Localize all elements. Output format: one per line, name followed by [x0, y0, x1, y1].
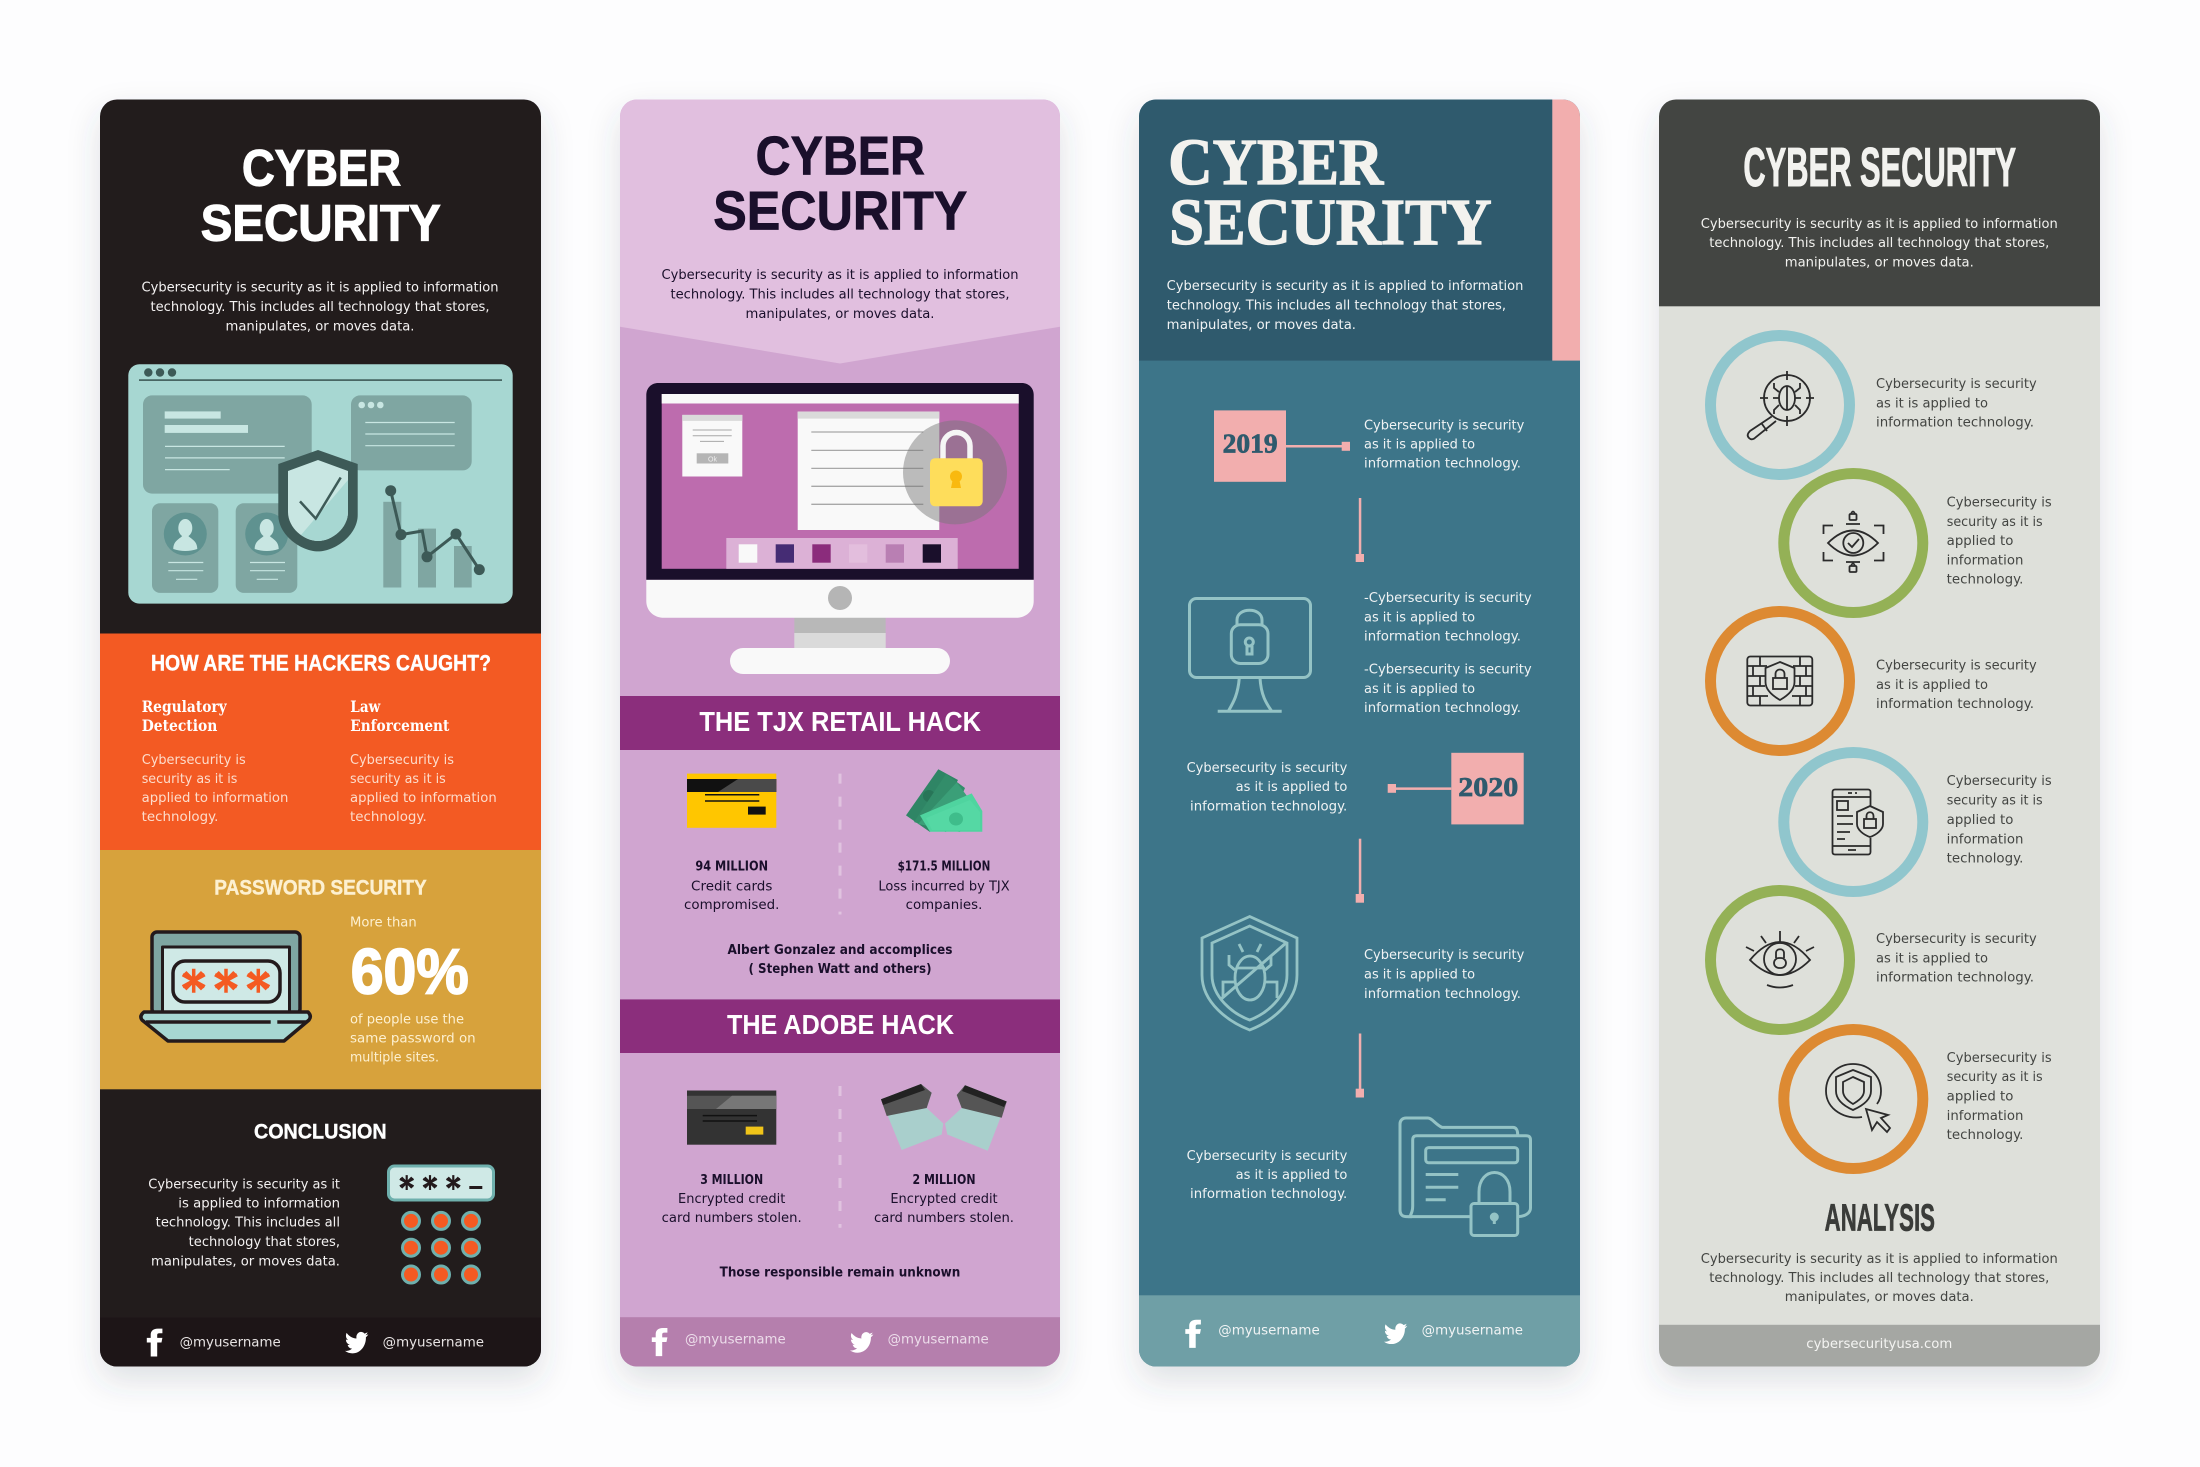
- illustration: security dashboard: [128, 364, 513, 604]
- item: firewall ring: [1710, 612, 2037, 750]
- text: shield description: [1364, 948, 1525, 1002]
- item: locked eye ring: Cybersecurity is security: [1876, 932, 2037, 947]
- footer: social handles: @myusername: [383, 1336, 484, 1351]
- timeline: 2019 marker: 2019: [1223, 428, 1278, 458]
- text: monitor descriptions: -Cybersecurity is security: [1364, 663, 1532, 678]
- section: conclusion: Cybersecurity is security as it: [148, 1177, 340, 1192]
- stat: 94 million: 94 MILLION: [695, 860, 768, 874]
- column: regulatory detection: technology.: [142, 810, 218, 825]
- footer: social handles: @myusername: [1422, 1324, 1523, 1338]
- title: CYBER: [242, 140, 401, 197]
- text: monitor descriptions: as it is applied to: [1364, 610, 1475, 625]
- panel: purple hacks poster: [620, 99, 1060, 1367]
- stat: 94 million: Credit cards: [691, 879, 773, 894]
- footer: website: cybersecurityusa.com: [1806, 1337, 1952, 1352]
- stat: 171.5 million dollars: Loss incurred by TJX: [878, 879, 1010, 894]
- stat: 60 percent: multiple sites.: [350, 1051, 439, 1066]
- intro text: Cybersecurity is security as it is applied to information: [662, 268, 1018, 283]
- analysis text: manipulates, or moves data.: [1785, 1290, 1974, 1305]
- item: shield click ring: security as it is: [1947, 1070, 2043, 1085]
- column: regulatory detection: Cybersecurity is: [142, 753, 246, 768]
- item: eye scan ring: technology.: [1947, 572, 2023, 588]
- panel: dark and orange cyber security poster: [100, 100, 541, 1368]
- icon: eye with padlock: [1746, 931, 1814, 988]
- icon: dark credit card: [687, 1090, 776, 1145]
- icon: password keypad: [388, 1166, 494, 1283]
- stat: 2 million: [874, 1173, 1014, 1226]
- title: [1168, 126, 1492, 259]
- intro text: technology. This includes all technology that stores,: [150, 300, 490, 315]
- text: folder description: as it is applied to: [1236, 1168, 1347, 1183]
- stat: 3 million: 3 MILLION: [700, 1173, 763, 1188]
- divider: [838, 1086, 842, 1228]
- stat: 60 percent: [350, 916, 476, 1066]
- analysis text: Cybersecurity is security as it is applied to information: [1701, 1252, 2058, 1267]
- item: phone security ring: information: [1947, 832, 2023, 847]
- text: monitor descriptions: as it is applied to: [1364, 682, 1475, 697]
- section: conclusion: manipulates, or moves data.: [151, 1254, 340, 1269]
- panel: teal timeline poster: [1139, 99, 1580, 1367]
- item: firewall ring: Cybersecurity is security: [1876, 659, 2037, 674]
- note: those responsible: Those responsible remain unknown: [720, 1265, 960, 1280]
- text: shield description: Cybersecurity is security: [1364, 948, 1525, 963]
- column: regulatory detection: applied to information: [142, 791, 288, 806]
- section: conclusion: [148, 1121, 494, 1283]
- timeline: 2020 marker: 2020: [1458, 772, 1518, 802]
- item: firewall ring: as it is applied to: [1876, 678, 1988, 693]
- timeline: 2019 marker: [1214, 410, 1350, 482]
- title: SECURITY: [713, 180, 967, 242]
- text: 2019 description: information technology.: [1364, 457, 1521, 472]
- illustration: desktop monitor with padlock: [646, 383, 1034, 674]
- stat: 94 million: [684, 860, 779, 913]
- item: shield click ring: Cybersecurity is: [1947, 1051, 2052, 1066]
- section: the adobe hack: [662, 1009, 1014, 1280]
- text: folder description: Cybersecurity is security: [1187, 1149, 1348, 1164]
- item: shield click ring: applied to: [1947, 1090, 2013, 1104]
- text: 2019 description: Cybersecurity is security: [1364, 419, 1525, 434]
- icon: stack of banknotes: [906, 769, 982, 832]
- stat: 2 million: card numbers stolen.: [874, 1211, 1014, 1226]
- footer: social handles: @myusername: [685, 1333, 786, 1348]
- title: [201, 140, 441, 252]
- stat: 3 million: Encrypted credit: [678, 1192, 785, 1207]
- title: CYBER: [756, 124, 925, 186]
- title: SECURITY: [1169, 186, 1492, 259]
- item: eye scan ring: applied to: [1947, 534, 2013, 549]
- icon: broken card: [881, 1084, 1007, 1151]
- item: phone security ring: technology.: [1947, 852, 2023, 867]
- divider: [838, 774, 842, 914]
- intro text: [662, 268, 1018, 322]
- footer: social handles: [1185, 1320, 1523, 1348]
- section: conclusion: is applied to information: [178, 1196, 340, 1212]
- text: monitor descriptions: -Cybersecurity is security: [1364, 591, 1532, 606]
- text: monitor descriptions: information technology.: [1364, 701, 1521, 716]
- icon: laptop with password: [141, 932, 310, 1041]
- text: folder description: [1187, 1149, 1348, 1202]
- column: law enforcement: Enforcement: [350, 716, 450, 735]
- text: 2020 description: as it is applied to: [1236, 780, 1347, 795]
- intro text: technology. This includes all technology that stores,: [1709, 236, 2049, 251]
- footer: social handles: @myusername: [180, 1336, 281, 1351]
- text: shield description: information technology.: [1364, 987, 1521, 1002]
- item: shield click ring: [1784, 1030, 2052, 1168]
- stat: 171.5 million dollars: $171.5 MILLION: [898, 860, 990, 874]
- footer: social handles: [147, 1329, 484, 1356]
- credit: attackers: [728, 943, 953, 977]
- column: law enforcement: Cybersecurity is: [350, 753, 454, 768]
- text: shield description: as it is applied to: [1364, 967, 1475, 982]
- title: CYBER: [1168, 126, 1385, 199]
- item: shield click ring: technology.: [1947, 1128, 2023, 1143]
- intro text: [1701, 217, 2058, 270]
- stat: 3 million: [662, 1173, 802, 1226]
- stat: 94 million: compromised.: [684, 898, 779, 913]
- item: phone security ring: Cybersecurity is: [1947, 774, 2052, 789]
- section: how are the hackers caught: [142, 651, 497, 825]
- text: folder description: information technology.: [1190, 1187, 1347, 1202]
- item: phone security ring: [1784, 752, 2052, 892]
- stat: 171.5 million dollars: companies.: [906, 898, 982, 913]
- intro text: Cybersecurity is security as it is applied to information: [1167, 279, 1523, 294]
- item: locked eye ring: as it is applied to: [1876, 951, 1988, 966]
- intro text: [1167, 279, 1523, 333]
- text: 2019 description: [1364, 419, 1525, 472]
- item: eye scan ring: information: [1947, 553, 2023, 568]
- intro text: technology. This includes all technology that stores,: [670, 288, 1010, 303]
- column: law enforcement: [350, 697, 497, 825]
- item: phone security ring: applied to: [1947, 813, 2013, 828]
- analysis text: [1701, 1252, 2058, 1305]
- heading: analysis: ANALYSIS: [1825, 1198, 1935, 1240]
- section: the adobe hack: THE ADOBE HACK: [727, 1009, 954, 1040]
- stat: 3 million: card numbers stolen.: [662, 1211, 802, 1226]
- text: 2020 description: Cybersecurity is security: [1187, 761, 1348, 776]
- icon: yellow credit card: [687, 774, 776, 828]
- intro text: [142, 280, 498, 334]
- panel: grey analysis poster: [1659, 99, 2100, 1368]
- column: regulatory detection: security as it is: [142, 772, 238, 787]
- intro text: manipulates, or moves data.: [1785, 255, 1974, 270]
- item: eye scan ring: security as it is: [1947, 515, 2043, 530]
- item: locked eye ring: information technology.: [1876, 970, 2034, 985]
- icon: locked folder: [1400, 1118, 1530, 1236]
- icon: magnifier with bug: [1748, 371, 1814, 439]
- stat: 60 percent: same password on: [350, 1031, 476, 1046]
- column: regulatory detection: [142, 697, 288, 825]
- credit: attackers: Albert Gonzalez and accomplices: [728, 943, 953, 958]
- analysis text: technology. This includes all technology that stores,: [1709, 1271, 2049, 1286]
- section: how are the hackers caught: HOW ARE THE HACKERS CAUGHT?: [151, 651, 491, 676]
- intro text: technology. This includes all technology that stores,: [1167, 299, 1506, 314]
- text: 2020 description: information technology.: [1190, 800, 1347, 814]
- title: [713, 124, 967, 242]
- column: regulatory detection: Regulatory: [142, 697, 228, 716]
- stat: 171.5 million dollars: [878, 860, 1010, 913]
- item: phone security ring: security as it is: [1947, 794, 2043, 809]
- text: monitor descriptions: [1364, 591, 1532, 716]
- text: monitor descriptions: information technology.: [1364, 630, 1521, 645]
- stat: 2 million: 2 MILLION: [912, 1173, 976, 1188]
- icon: firewall with shield: [1747, 656, 1812, 706]
- stat: 60 percent: of people use the: [350, 1012, 464, 1027]
- item: eye scan ring: [1784, 474, 2052, 612]
- intro text: manipulates, or moves data.: [746, 307, 934, 322]
- section: password security: PASSWORD SECURITY: [214, 877, 427, 900]
- column: law enforcement: security as it is: [350, 772, 446, 787]
- icon: phone with shield: [1832, 790, 1883, 854]
- icon: shield with cursor: [1826, 1064, 1890, 1132]
- section: conclusion: CONCLUSION: [254, 1121, 387, 1144]
- section: password security: [141, 877, 476, 1066]
- connector: [1356, 498, 1364, 562]
- section: the TJX retail hack: [684, 706, 1010, 977]
- stat: 60 percent: More than: [350, 916, 417, 931]
- connector: [1356, 1034, 1364, 1098]
- item: bug search ring: [1710, 336, 2037, 474]
- illustration: desktop monitor with padlock: Ok: [708, 456, 717, 464]
- connector: [1356, 839, 1364, 903]
- item: bug search ring: as it is applied to: [1876, 396, 1988, 412]
- item: shield click ring: information: [1947, 1109, 2023, 1124]
- stat: 60 percent: 60%: [351, 936, 469, 1008]
- column: law enforcement: technology.: [350, 810, 427, 825]
- section: the TJX retail hack: THE TJX RETAIL HACK: [699, 706, 981, 737]
- footer: social handles: [652, 1328, 989, 1356]
- section: conclusion: technology that stores,: [189, 1235, 340, 1250]
- title: SECURITY: [201, 195, 441, 252]
- column: law enforcement: Law: [350, 697, 381, 716]
- text: 2019 description: as it is applied to: [1364, 437, 1475, 452]
- credit: attackers: ( Stephen Watt and others): [748, 962, 932, 977]
- item: bug search ring: information technology.: [1876, 416, 2034, 431]
- section: conclusion: technology. This includes all: [156, 1216, 340, 1231]
- intro text: manipulates, or moves data.: [1167, 318, 1356, 333]
- footer: social handles: @myusername: [1218, 1324, 1320, 1338]
- item: firewall ring: information technology.: [1876, 697, 2034, 712]
- item: eye scan ring: Cybersecurity is: [1947, 495, 2052, 510]
- item: bug search ring: Cybersecurity is security: [1876, 377, 2037, 392]
- icon: shield with crossed bug: [1202, 916, 1297, 1030]
- stat: 2 million: Encrypted credit: [890, 1192, 998, 1207]
- footer: social handles: @myusername: [888, 1333, 989, 1348]
- item: locked eye ring: [1710, 890, 2037, 1030]
- column: regulatory detection: Detection: [142, 716, 217, 735]
- icon: eye with check: [1824, 512, 1884, 572]
- intro text: manipulates, or moves data.: [226, 319, 414, 334]
- text: 2020 description: [1187, 761, 1348, 814]
- timeline: 2020 marker: [1388, 753, 1524, 824]
- column: law enforcement: applied to information: [350, 791, 497, 806]
- intro text: Cybersecurity is security as it is applied to information: [142, 280, 498, 296]
- intro text: Cybersecurity is security as it is applied to information: [1701, 217, 2058, 232]
- icon: monitor with padlock: [1190, 598, 1310, 711]
